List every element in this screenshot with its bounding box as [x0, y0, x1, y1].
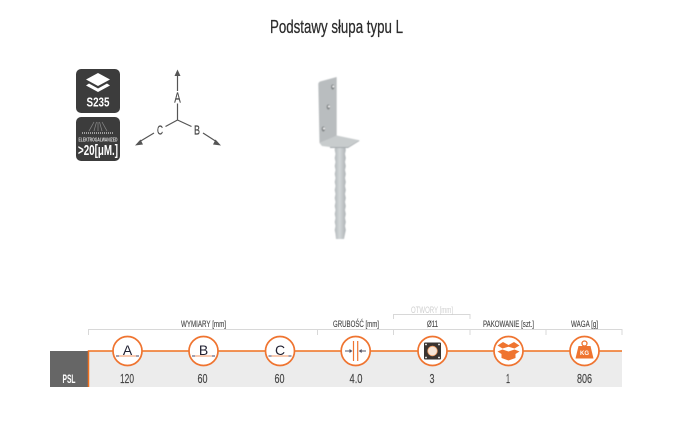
axis diagram	[135, 70, 221, 146]
row values: 1	[506, 372, 510, 386]
axis diagram: C	[157, 122, 163, 138]
table band	[88, 351, 622, 387]
badge: S235 steel: S235	[86, 94, 110, 110]
row label: PSL: PSL	[62, 372, 76, 386]
column headings: OTWORY [mm]	[411, 305, 453, 315]
icon: weight	[570, 336, 599, 366]
column headings: Ø11	[427, 319, 438, 329]
axis diagram: A	[174, 90, 181, 106]
column headings: PAKOWANIE [szt.]	[483, 319, 534, 329]
icon: dimension B	[189, 336, 218, 366]
icon: packaging box	[494, 336, 523, 366]
icon: weight: KG	[580, 351, 589, 357]
icon: dimension C	[266, 336, 294, 366]
icon: dimension A	[113, 336, 142, 366]
header bracket	[88, 330, 622, 335]
icon: dimension C: C	[275, 342, 285, 358]
icon: thickness	[341, 336, 370, 366]
row values	[120, 372, 592, 386]
row values: 60	[198, 372, 208, 386]
product image: L post base	[318, 77, 359, 239]
badge: S235 steel	[76, 69, 120, 113]
row values: 4.0	[350, 372, 363, 386]
icon: dimension B: B	[199, 342, 208, 358]
icon: holes plate	[418, 336, 447, 366]
title: Podstawy słupa typu L	[270, 17, 403, 37]
upper bracket: holes	[394, 314, 470, 319]
column headings: GRUBOŚĆ [mm]	[333, 318, 379, 329]
row values: 3	[430, 372, 435, 386]
icon: dimension A: A	[123, 342, 133, 358]
row values: 120	[120, 372, 134, 386]
row label: PSL	[50, 351, 88, 387]
column headings: WAGA [g]	[571, 319, 598, 329]
row values: 60	[274, 372, 285, 386]
badge: electrogalvanized coating: ELEKTROGALWANIZED	[78, 138, 118, 144]
column headings: WYMIARY [mm]	[181, 319, 226, 329]
badge: electrogalvanized coating	[76, 117, 120, 161]
column headings	[181, 305, 598, 329]
row values: 806	[577, 372, 592, 386]
axis diagram: B	[194, 122, 200, 138]
orange rule	[88, 351, 622, 387]
badge: electrogalvanized coating: >20[μM.]	[78, 143, 118, 159]
